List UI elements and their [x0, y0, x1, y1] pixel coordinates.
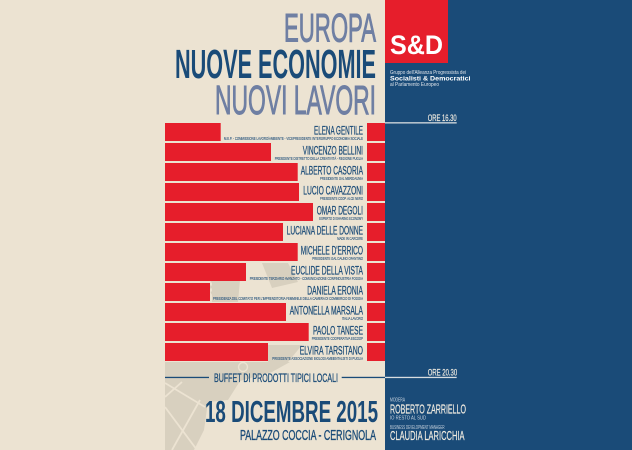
speaker row: Michele D'Errico: MICHELE D'ERRICO: [301, 244, 363, 258]
logo: S&D red box: [385, 0, 448, 63]
venue: PALAZZO COCCIA - CERIGNOLA: [240, 428, 376, 444]
time label: 16.30: ORE 16.30: [428, 113, 457, 124]
speaker row: Lucio Cavazzoni: [165, 183, 385, 202]
speaker row: Elena Gentile: M.E.P. - COMMISSIONE LAVORO/AMBIENTE - VICEPRESIDENTE INTERGRUPPO ECONOMIA SOCIALE: [224, 136, 363, 142]
group description: Gruppo dell'Alleanza Progressista dei: [390, 70, 466, 76]
speaker row: Paolo Tanese: PRESIDENTE COOPERATIVA ESCOOP: [312, 336, 363, 342]
speaker row: Luciana Delle Donne: MADE IN CARCERE: [337, 236, 363, 242]
business manager block: BUSINESS DEVELOPMENT MANAGER: [390, 425, 445, 431]
speaker row: Daniela Eronia: [165, 283, 385, 302]
title line: Nuovi Lavori: NUOVI LAVORI: [215, 77, 376, 123]
speaker row: Alberto Casoria: [165, 163, 385, 182]
speaker row: Antonella Marsala: ANTONELLA MARSALA: [290, 304, 363, 318]
speaker row: Alberto Casoria: ALBERTO CASORIA: [301, 164, 363, 178]
title line: Nuove Economie: NUOVE ECONOMIE: [175, 41, 376, 87]
title: [175, 6, 376, 123]
speaker row: Lucio Cavazzoni: PRESIDENTE COOP. ALCE NERO: [320, 196, 363, 202]
group description: Socialisti & Democratici: [390, 76, 471, 82]
buffet line: BUFFET DI PRODOTTI TIPICI LOCALI: [214, 371, 338, 385]
speaker row: Euclide Della Vista: [165, 263, 385, 282]
speaker row: Alberto Casoria: PRESIDENTE GAL MERIDAUNIA: [320, 176, 363, 182]
background cream: [0, 0, 385, 450]
moderator block: MODERA: [390, 398, 405, 404]
speaker row: Paolo Tanese: PAOLO TANESE: [313, 324, 363, 338]
speaker row: Daniela Eronia: PRESIDENZA DEL COMITATO PER L'IMPRENDITORIA FEMMINILE DELLA CAMERA DI COMMERCIO DI FOGGIA: [213, 296, 363, 302]
speaker row: Lucio Cavazzoni: LUCIO CAVAZZONI: [303, 184, 363, 198]
speaker row: Elvira Tarsitano: [165, 343, 385, 362]
speaker row: Luciana Delle Donne: [165, 223, 385, 242]
speaker row: Vincenzo Bellini: [165, 143, 385, 162]
group description: al Parlamento Europeo: [390, 82, 439, 88]
speaker row: Vincenzo Bellini: PRESIDENTE DISTRETTO DELLA CREATIVITÀ - REGIONE PUGLIA: [275, 155, 363, 162]
speaker row: Omar Degoli: ESPERTO DI SHARING ECONOMY: [319, 216, 363, 222]
logo: S&D red box: S&D: [390, 30, 443, 60]
speaker row: Elena Gentile: [165, 123, 385, 142]
moderator block: IO RESTO AL SUD: [390, 416, 426, 422]
speaker row: Paolo Tanese: [165, 323, 385, 342]
speaker row: Michele D'Errico: PRESIDENTE GAL DAUNO OFANTINO: [312, 256, 363, 262]
time label: 16.30: [385, 113, 457, 124]
speaker row: Antonella Marsala: ITALIA LAVORO: [342, 316, 363, 322]
speaker row: Elena Gentile: ELENA GENTILE: [314, 124, 363, 138]
speaker row: Daniela Eronia: DANIELA ERONIA: [307, 284, 363, 298]
panel: blue right side: [385, 0, 632, 450]
business manager block: CLAUDIA LARICCHIA: [390, 428, 465, 443]
business manager block: [390, 425, 465, 443]
date: 18 DICEMBRE 2015: [205, 394, 378, 429]
speaker row: Euclide Della Vista: EUCLIDE DELLA VISTA: [291, 264, 363, 278]
speaker row: Omar Degoli: [165, 203, 385, 222]
time label: 20.30: [385, 368, 457, 379]
moderator block: ROBERTO ZARRIELLO: [390, 401, 466, 416]
speaker row: Omar Degoli: OMAR DEGOLI: [317, 204, 363, 218]
moderator block: [390, 398, 466, 422]
speaker row: Elvira Tarsitano: PRESIDENTE ASSOCIAZIONE BIOLOGI AMBIENTALISTI DI PUGLIA: [272, 356, 363, 362]
speaker row: Elvira Tarsitano: ELVIRA TARSITANO: [300, 344, 363, 358]
speaker row: Vincenzo Bellini: VINCENZO BELLINI: [303, 144, 363, 158]
speaker row: Michele D'Errico: [165, 243, 385, 262]
title line: Europa: EUROPA: [284, 6, 376, 50]
time label: 20.30: ORE 20.30: [428, 368, 457, 379]
speaker row: Luciana Delle Donne: LUCIANA DELLE DONNE: [287, 224, 363, 238]
watermark: map, gears and key: [165, 263, 302, 450]
group description: [390, 70, 471, 88]
speaker row: Antonella Marsala: [165, 303, 385, 322]
speakers list: [165, 123, 385, 362]
speaker row: Euclide Della Vista: PRESIDENTE TERZIARIO AVANZATO - COMUNICAZIONE CONFINDUSTRIA FOGGIA: [250, 276, 363, 282]
